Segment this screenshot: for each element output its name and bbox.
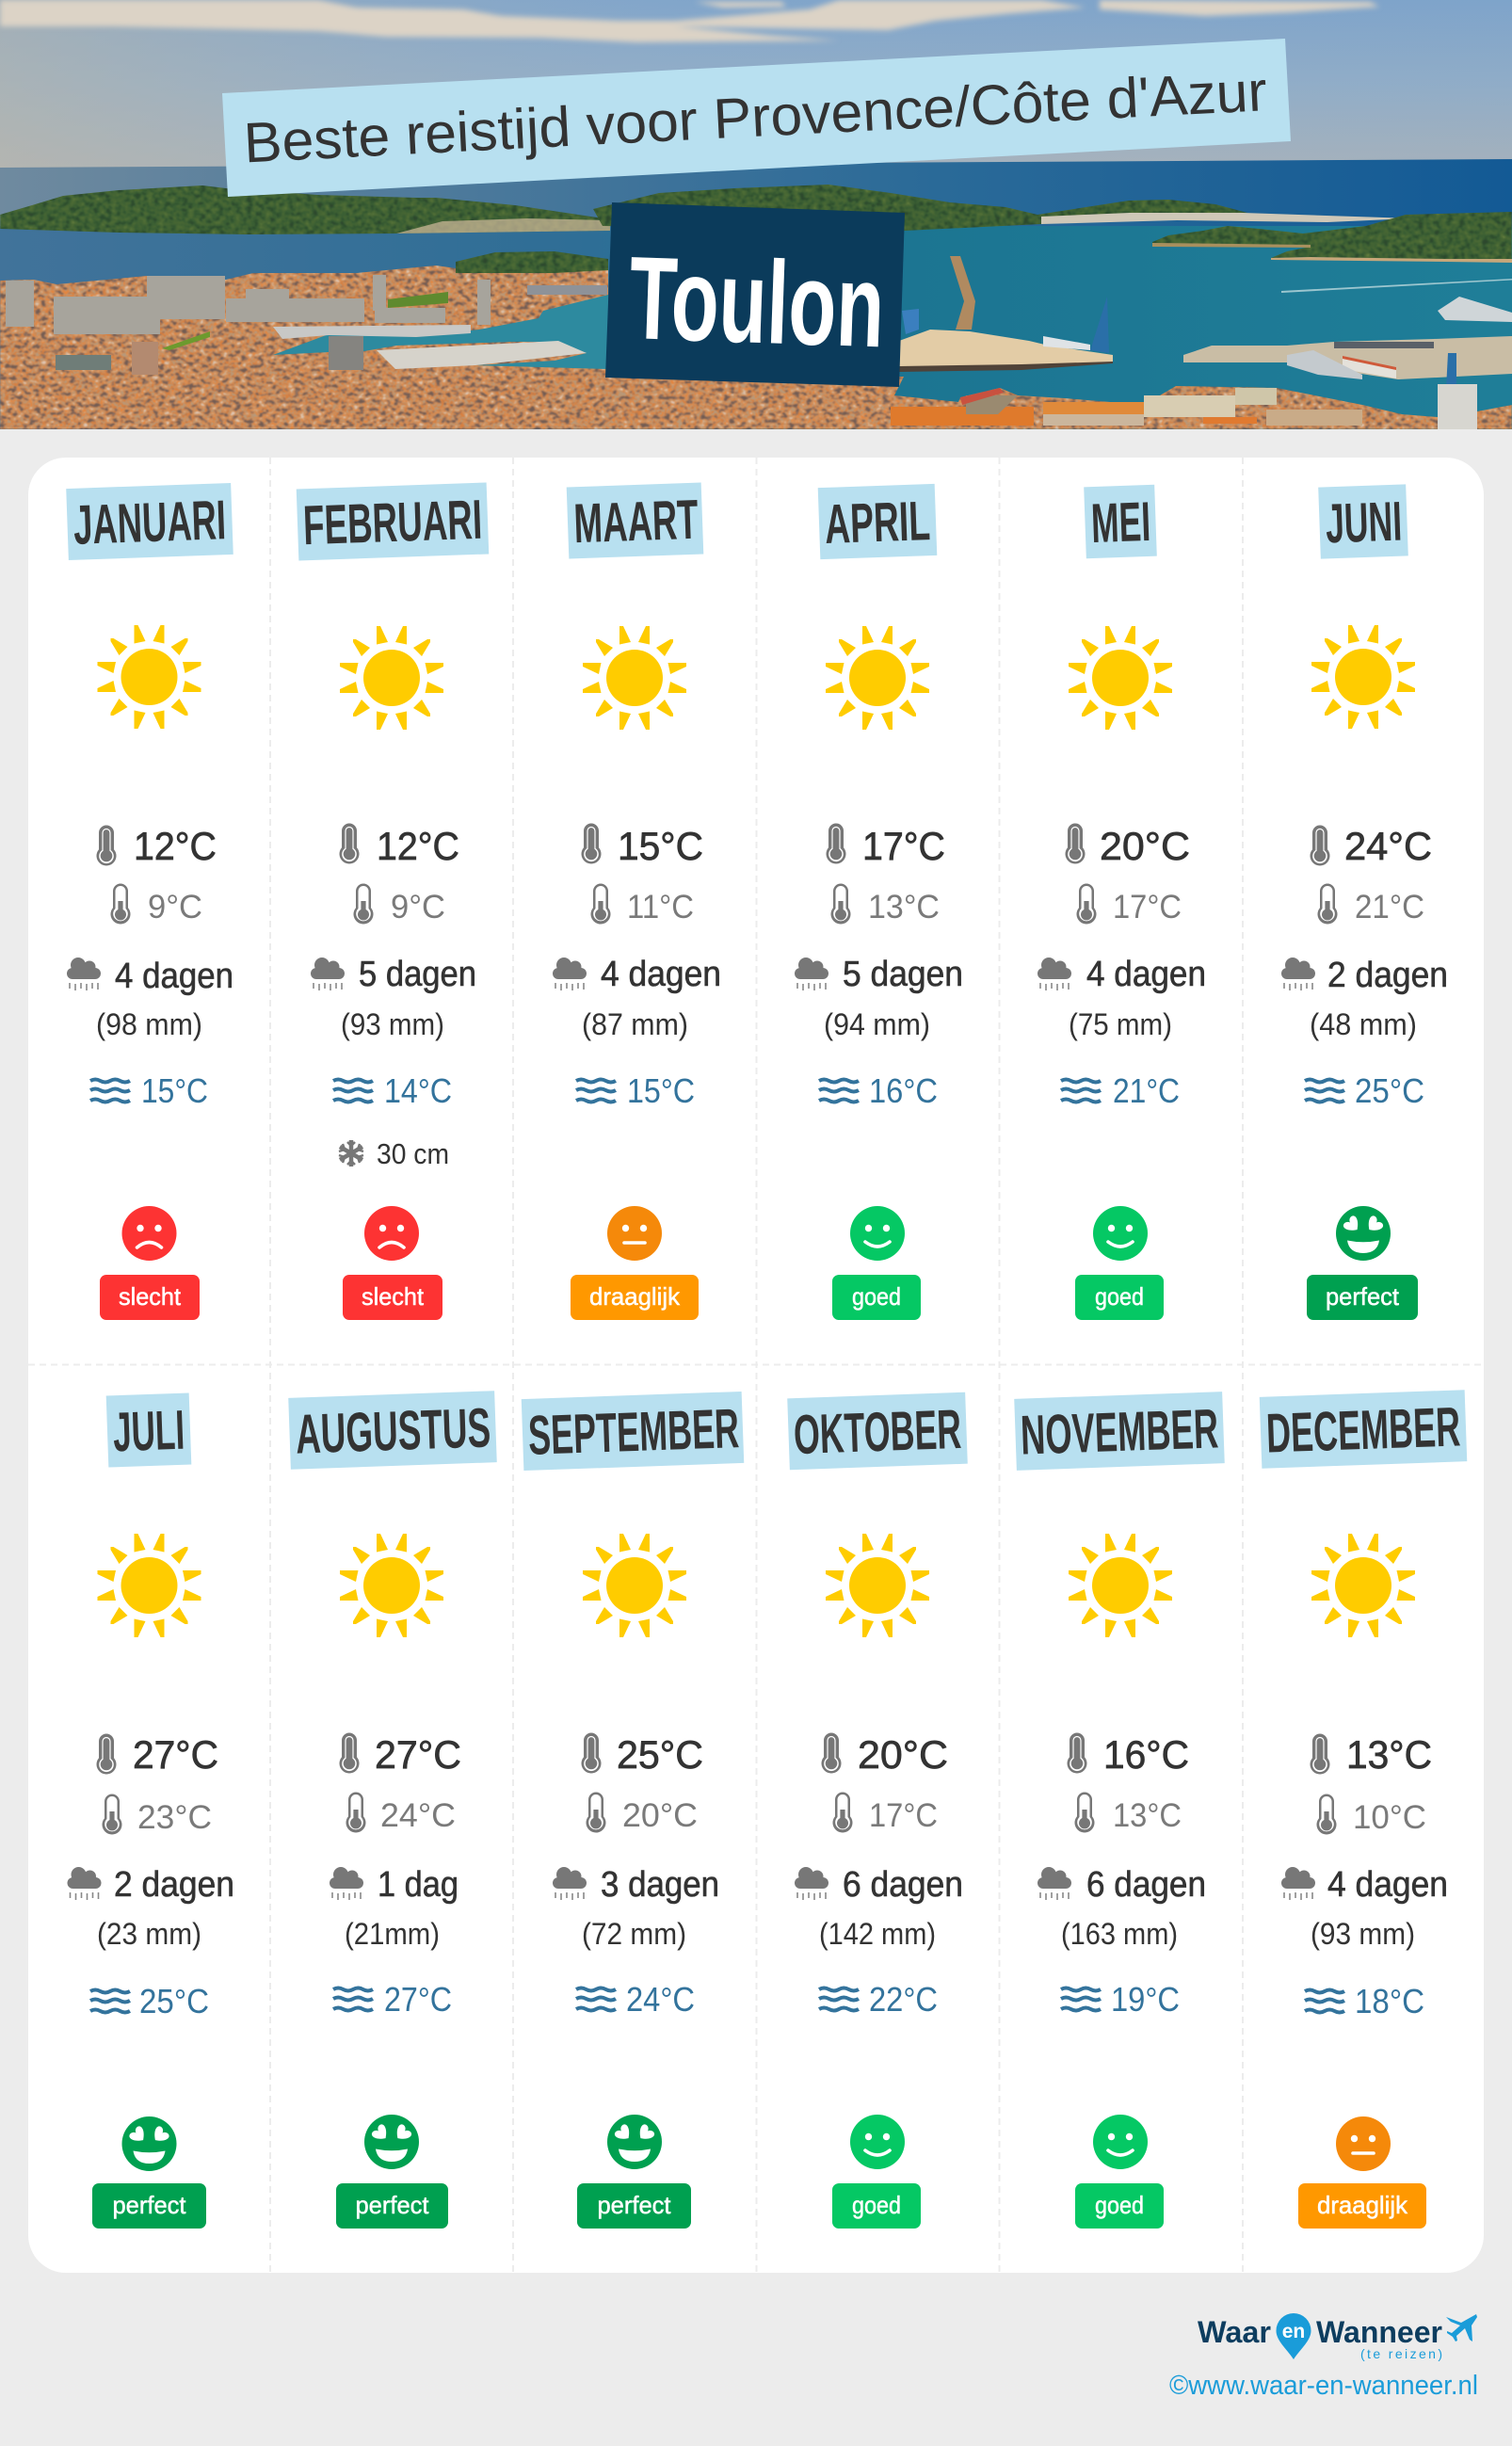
city banner: Toulon <box>605 202 905 387</box>
heading: MEI <box>1090 491 1151 555</box>
min temperature <box>830 883 940 925</box>
icon: plane <box>1446 2314 1477 2341</box>
heading: OKTOBER <box>793 1398 962 1466</box>
min temperature: 24°C <box>380 1797 456 1834</box>
max temperature: 16°C <box>1103 1732 1189 1777</box>
rating badge <box>1075 2183 1164 2229</box>
rating face <box>1093 2115 1148 2169</box>
logo: Waar en Wanneer: (te reizen) <box>1360 2346 1442 2361</box>
max temperature: 15°C <box>618 824 703 868</box>
rating badge: goed <box>852 2191 901 2219</box>
rating badge <box>92 2183 206 2229</box>
heading <box>787 1392 968 1470</box>
rating badge <box>1307 1275 1418 1320</box>
rainfall: (23 mm) <box>97 1917 201 1951</box>
rain days <box>1281 956 1448 995</box>
rain days <box>1037 1865 1206 1905</box>
max temperature: 12°C <box>377 824 459 868</box>
rating badge <box>577 2183 691 2229</box>
sea temperature <box>1305 1982 1424 2020</box>
icon: map pin: en <box>1282 2321 1305 2342</box>
rain days <box>68 1865 234 1905</box>
rating badge <box>1075 1275 1164 1320</box>
max temperature: 12°C <box>134 824 217 868</box>
rainfall: (75 mm) <box>1069 1007 1172 1041</box>
logo: Waar en Wanneer: Waar <box>1198 2315 1271 2349</box>
icon: sun <box>826 1534 929 1637</box>
rainfall: (142 mm) <box>819 1917 936 1951</box>
heading <box>522 1392 744 1471</box>
icon: sun <box>1311 625 1415 729</box>
city banner: Toulon: Toulon <box>627 233 887 372</box>
rating badge: perfect <box>356 2191 429 2219</box>
rating badge <box>100 1275 200 1320</box>
max temperature: 13°C <box>1346 1732 1432 1777</box>
max temperature: 24°C <box>1344 824 1432 868</box>
rating badge <box>571 1275 699 1320</box>
rating badge: goed <box>1095 2191 1144 2219</box>
max temperature: 27°C <box>133 1732 218 1777</box>
rating badge: perfect <box>597 2191 671 2219</box>
sea temperature: 27°C <box>384 1980 452 2019</box>
rain days: 6 dagen <box>843 1865 963 1905</box>
sea temperature <box>333 1071 452 1110</box>
min temperature <box>1075 1793 1182 1834</box>
rating face <box>364 2115 419 2169</box>
rating face <box>1093 1206 1148 1261</box>
min temperature: 9°C <box>148 889 202 925</box>
sea temperature <box>576 1071 695 1110</box>
min temperature: 20°C <box>622 1797 698 1834</box>
sea temperature <box>333 1980 452 2019</box>
min temperature <box>346 1793 456 1834</box>
rating face <box>122 1206 177 1261</box>
sea temperature: 24°C <box>626 1980 695 2019</box>
header photo: Toulon bay <box>0 0 1512 429</box>
month: oktober <box>787 1392 968 2229</box>
sea temperature: 15°C <box>627 1071 695 1110</box>
icon: sun <box>583 1534 686 1637</box>
website credit: ©www.waar-en-wanneer.nl <box>1169 2371 1478 2401</box>
heading: AUGUSTUS <box>295 1396 491 1466</box>
snow depth <box>339 1137 449 1170</box>
sea temperature: 15°C <box>141 1071 208 1110</box>
sea temperature: 14°C <box>384 1071 452 1110</box>
rating badge: slecht <box>362 1282 425 1311</box>
snow depth: 30 cm <box>377 1137 449 1170</box>
icon: sun <box>340 626 443 730</box>
rain days <box>67 957 233 996</box>
min temperature: 13°C <box>1113 1797 1182 1834</box>
month: september <box>522 1392 744 2229</box>
sea temperature <box>576 1980 695 2019</box>
rainfall: (94 mm) <box>824 1007 930 1041</box>
heading <box>106 1392 191 1468</box>
min temperature: 17°C <box>869 1797 938 1834</box>
min temperature <box>586 1793 698 1834</box>
max temperature <box>1311 1732 1432 1777</box>
min temperature <box>1316 1794 1426 1836</box>
max temperature: 17°C <box>862 824 945 868</box>
rain days: 4 dagen <box>1327 1865 1448 1905</box>
heading: MAART <box>572 489 700 555</box>
icon: sun <box>1069 626 1172 730</box>
rain days <box>1037 955 1206 994</box>
sea temperature <box>1305 1071 1424 1110</box>
rating face <box>607 1206 662 1261</box>
rating badge <box>336 2183 448 2229</box>
rating badge: perfect <box>113 2191 186 2219</box>
max temperature <box>1068 1732 1189 1777</box>
icon: sun <box>583 626 686 730</box>
sea temperature: 16°C <box>869 1071 938 1110</box>
heading <box>818 484 937 559</box>
rating face <box>122 2116 177 2171</box>
rain days: 2 dagen <box>114 1865 234 1905</box>
min temperature <box>591 883 694 925</box>
heading <box>1084 485 1157 558</box>
rating badge: slecht <box>119 1282 182 1311</box>
min temperature: 13°C <box>868 889 940 925</box>
min temperature: 23°C <box>137 1799 212 1836</box>
icon: map pin <box>1277 2313 1311 2359</box>
month: augustus <box>288 1391 497 2229</box>
sea temperature: 21°C <box>1113 1071 1180 1110</box>
rating badge <box>343 1275 442 1320</box>
rainfall: (93 mm) <box>1311 1917 1415 1951</box>
month: mei <box>1037 485 1206 1320</box>
max temperature <box>827 823 945 868</box>
heading <box>567 483 703 558</box>
rainfall: (163 mm) <box>1061 1917 1178 1951</box>
rainfall: (87 mm) <box>582 1007 688 1041</box>
min temperature: 17°C <box>1113 889 1182 925</box>
rain days: 2 dagen <box>1327 956 1448 995</box>
sea temperature: 19°C <box>1111 1980 1180 2019</box>
rating face <box>850 1206 905 1261</box>
rainfall: (48 mm) <box>1310 1007 1417 1041</box>
heading <box>1318 484 1408 559</box>
sea temperature: 25°C <box>1355 1071 1424 1110</box>
month: november <box>1014 1392 1225 2229</box>
rating badge: draaglijk <box>589 1282 681 1311</box>
rainfall: (98 mm) <box>96 1007 202 1041</box>
heading: FEBRUARI <box>302 489 483 556</box>
icon: sun <box>1311 1534 1415 1637</box>
rating face <box>364 1206 419 1261</box>
rain days: 4 dagen <box>1086 955 1206 994</box>
rain days: 4 dagen <box>115 957 233 996</box>
heading: SEPTEMBER <box>527 1397 740 1467</box>
rating badge: perfect <box>1326 1282 1400 1311</box>
rain days: 5 dagen <box>843 955 963 994</box>
sea temperature: 18°C <box>1355 1982 1424 2020</box>
rating badge: goed <box>1095 1282 1144 1311</box>
sea temperature: 25°C <box>139 1982 209 2020</box>
month: maart <box>553 483 721 1320</box>
min temperature: 11°C <box>627 889 694 925</box>
heading <box>297 482 489 561</box>
max temperature: 20°C <box>1100 824 1190 868</box>
rating badge: goed <box>852 1282 901 1311</box>
rain days <box>311 955 476 994</box>
rain days: 1 dag <box>378 1865 458 1905</box>
sea temperature <box>819 1071 938 1110</box>
rain days <box>330 1865 458 1905</box>
heading: JULI <box>112 1399 185 1463</box>
rating badge <box>1298 2183 1426 2229</box>
min temperature: 21°C <box>1355 889 1424 925</box>
heading: JUNI <box>1325 491 1403 555</box>
rating face <box>607 2115 662 2169</box>
icon: sun <box>98 625 201 729</box>
rainfall: (72 mm) <box>582 1917 686 1951</box>
heading: APRIL <box>824 490 931 555</box>
max temperature: 27°C <box>375 1732 461 1777</box>
rain days: 3 dagen <box>601 1865 719 1905</box>
heading <box>288 1391 497 1470</box>
min temperature <box>354 883 445 925</box>
icon: sun <box>98 1534 201 1637</box>
month: juli <box>68 1392 234 2229</box>
max temperature <box>96 824 217 868</box>
max temperature: 25°C <box>617 1732 703 1777</box>
month: februari <box>297 482 489 1320</box>
sea temperature <box>1061 1071 1180 1110</box>
panel: monthly card <box>28 458 1484 2273</box>
rain days <box>795 955 963 994</box>
month: januari <box>66 483 233 1320</box>
month: december <box>1260 1390 1467 2229</box>
min temperature: 10°C <box>1353 1799 1426 1836</box>
rating face <box>1336 1206 1391 1261</box>
rainfall: (21mm) <box>345 1917 440 1951</box>
heading <box>66 483 233 560</box>
min temperature <box>111 883 202 925</box>
max temperature: 20°C <box>858 1732 948 1777</box>
min temperature <box>832 1793 938 1834</box>
max temperature <box>96 1732 218 1777</box>
sea temperature <box>1061 1980 1180 2019</box>
month: april <box>795 484 963 1320</box>
rating badge <box>832 1275 921 1320</box>
rain days: 6 dagen <box>1086 1865 1206 1905</box>
rain days <box>553 955 721 994</box>
sea temperature: 22°C <box>869 1980 938 2019</box>
rating badge <box>832 2183 921 2229</box>
max temperature <box>339 823 459 868</box>
rating badge: draaglijk <box>1317 2191 1408 2219</box>
sea temperature <box>90 1982 209 2020</box>
month: juni <box>1281 484 1448 1320</box>
max temperature <box>821 1732 948 1777</box>
logo: Waar en Wanneer: Wanneer <box>1316 2315 1442 2349</box>
title banner: Beste reistijd voor Provence/Côte d'Azur <box>242 59 1268 174</box>
icon: sun <box>826 626 929 730</box>
min temperature <box>102 1794 212 1836</box>
min temperature: 9°C <box>391 889 445 925</box>
title banner <box>222 39 1291 197</box>
min temperature <box>1318 883 1424 925</box>
logo: Waar en Wanneer <box>1198 2313 1477 2361</box>
rain days <box>795 1865 963 1905</box>
rain days <box>553 1865 719 1905</box>
rating face <box>1336 2116 1391 2171</box>
heading: NOVEMBER <box>1020 1397 1219 1467</box>
sea temperature <box>819 1980 938 2019</box>
rating face <box>850 2115 905 2169</box>
rainfall: (93 mm) <box>341 1007 444 1041</box>
min temperature <box>1077 883 1182 925</box>
icon: sun <box>340 1534 443 1637</box>
max temperature <box>582 823 703 868</box>
heading: JANUARI <box>72 489 227 556</box>
rain days <box>1281 1865 1448 1905</box>
sea temperature <box>90 1071 208 1110</box>
rain days: 4 dagen <box>601 955 721 994</box>
icon: sun <box>1069 1534 1172 1637</box>
rain days: 5 dagen <box>359 955 476 994</box>
heading <box>1014 1392 1225 1471</box>
